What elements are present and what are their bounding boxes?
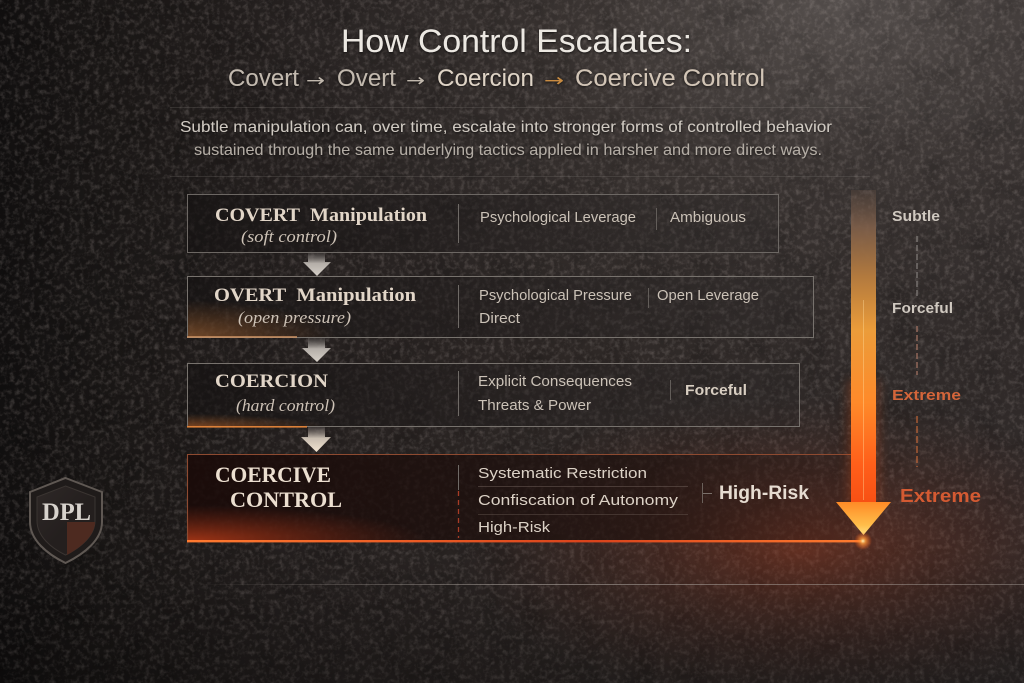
subtitle: escalation sequence: Covert [228, 65, 299, 92]
logo: DPL shield [30, 478, 102, 563]
covert tactic: Psychological Leverage [480, 209, 636, 226]
label: extreme: Extreme [892, 387, 961, 404]
intensity scale [892, 208, 981, 506]
subtitle: escalation sequence: Coercive Control [575, 65, 765, 92]
panel: overt manipulation [187, 276, 814, 338]
coercive control heading: COERCIVE [215, 462, 331, 487]
coercion tone: Forceful [685, 382, 747, 399]
overt tactics: Direct [479, 310, 521, 327]
label: forceful: Forceful [892, 300, 953, 317]
overt tactics: Psychological Pressure [479, 287, 632, 304]
panel: covert manipulation [188, 194, 778, 252]
overt heading: OVERT Manipulation [214, 285, 416, 306]
intro paragraph [180, 119, 833, 159]
coercive control tactics: Confiscation of Autonomy [478, 492, 679, 509]
coercion tactics: Explicit Consequences [478, 373, 632, 390]
arrow: overt to coercion [302, 338, 331, 362]
arrow: coercion to coercive control [301, 427, 331, 452]
overt tactics [479, 287, 632, 327]
covert heading: COVERT Manipulation [215, 205, 427, 226]
arrow: covert to overt [303, 253, 331, 276]
subtitle: escalation sequence: Coercion [437, 65, 534, 92]
panel: coercion [187, 364, 800, 428]
coercive control heading: CONTROL [230, 487, 342, 512]
coercive control heading [215, 462, 342, 512]
subtitle: escalation sequence: Overt [337, 65, 396, 92]
coercion subheading: (hard control) [236, 396, 335, 415]
label: extreme final: Extreme [900, 486, 981, 506]
label: subtle: Subtle [892, 208, 940, 225]
intro paragraph: sustained through the same underlying tactics applied in harsher and more direct ways. [194, 142, 822, 159]
covert tone: Ambiguous [670, 209, 746, 226]
coercion heading: COERCION [215, 371, 328, 392]
intro paragraph: Subtle manipulation can, over time, escalate into stronger forms of controlled behavior [180, 119, 833, 136]
title: How Control Escalates: [341, 23, 692, 59]
coercive control tactics: High-Risk [478, 519, 551, 536]
panel: coercive control [187, 454, 863, 542]
logo: DPL shield: DPL [42, 499, 91, 526]
coercive control tactics: Systematic Restriction [478, 465, 647, 482]
overt subheading: (open pressure) [238, 308, 351, 327]
subtitle: escalation sequence: → [306, 71, 325, 91]
coercive control tone: High-Risk [719, 483, 809, 504]
arrow: escalation intensity [836, 190, 891, 550]
overt leverage: Open Leverage [657, 287, 759, 304]
coercion tactics: Threats & Power [478, 397, 591, 414]
covert subheading: (soft control) [241, 227, 337, 246]
subtitle: escalation sequence: → [406, 71, 425, 91]
coercive control tactics [478, 465, 679, 536]
coercion tactics [478, 373, 632, 414]
subtitle: escalation sequence: → [544, 71, 564, 91]
subtitle: escalation sequence [228, 65, 765, 92]
